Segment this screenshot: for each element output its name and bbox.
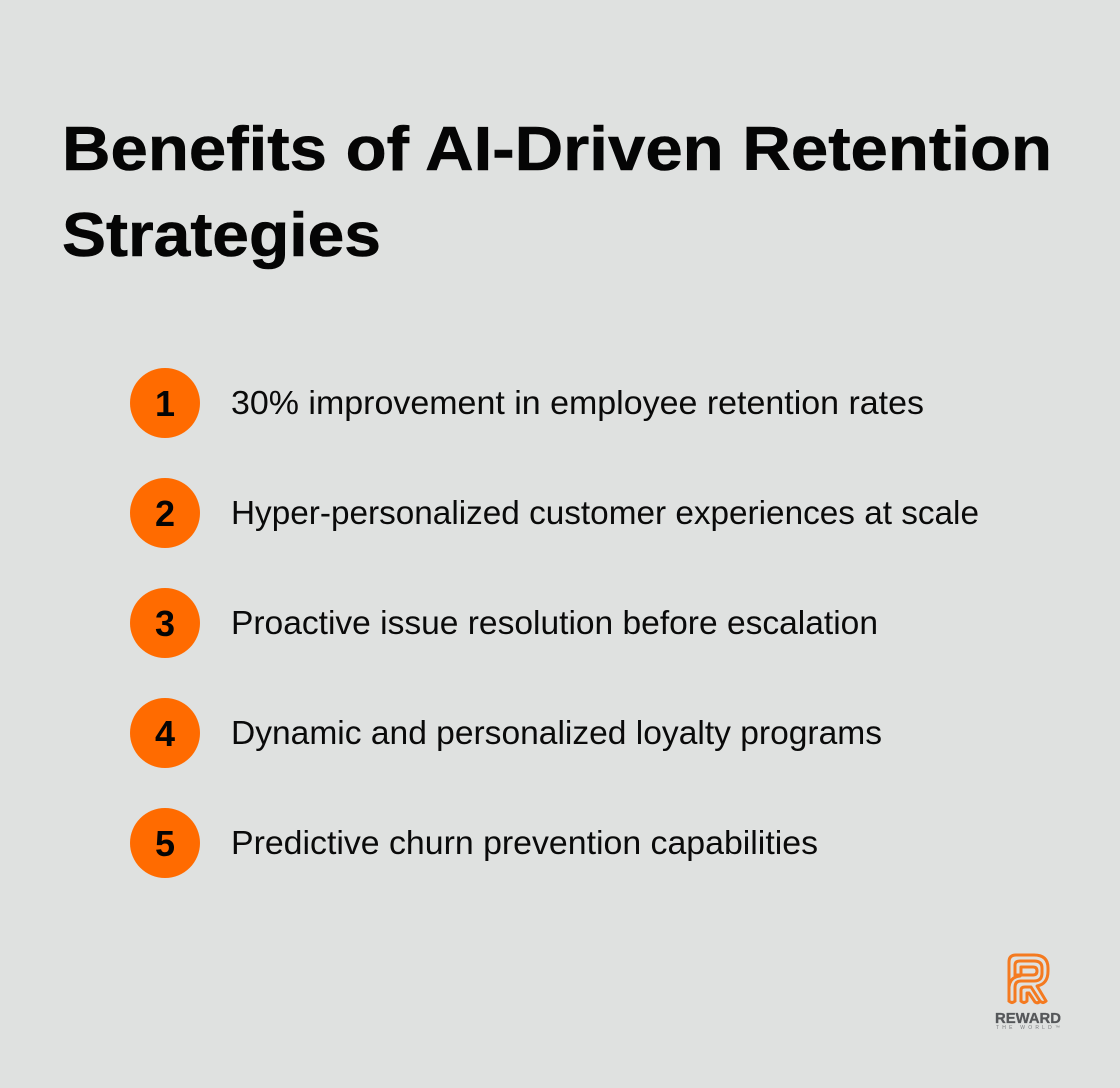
item 2: Hyper-personalized customer experiences at scale	[231, 494, 979, 531]
item 3: 3	[155, 603, 175, 644]
item 2	[130, 478, 979, 548]
title	[62, 115, 1052, 270]
item 2: 2	[155, 493, 175, 534]
icon: R mark	[1009, 955, 1048, 1003]
item 4: Dynamic and personalized loyalty programs	[231, 714, 882, 751]
logo: Reward the World	[995, 955, 1061, 1031]
item 3: Proactive issue resolution before escalation	[231, 604, 878, 641]
logo wordmark: REWARD	[995, 1010, 1061, 1027]
item 5: 5	[155, 823, 175, 864]
title: Strategies	[62, 201, 381, 270]
title: Benefits of AI-Driven Retention	[62, 115, 1052, 184]
item 5: Predictive churn prevention capabilities	[231, 824, 818, 861]
item 1: 30% improvement in employee retention rates	[231, 384, 924, 421]
item 4: 4	[155, 713, 175, 754]
item 1	[130, 368, 924, 438]
logo tagline: THE WORLD™	[996, 1025, 1060, 1031]
item 1: 1	[155, 383, 175, 424]
list of benefits	[130, 368, 979, 878]
item 5	[130, 808, 818, 878]
item 4	[130, 698, 882, 768]
item 3	[130, 588, 878, 658]
